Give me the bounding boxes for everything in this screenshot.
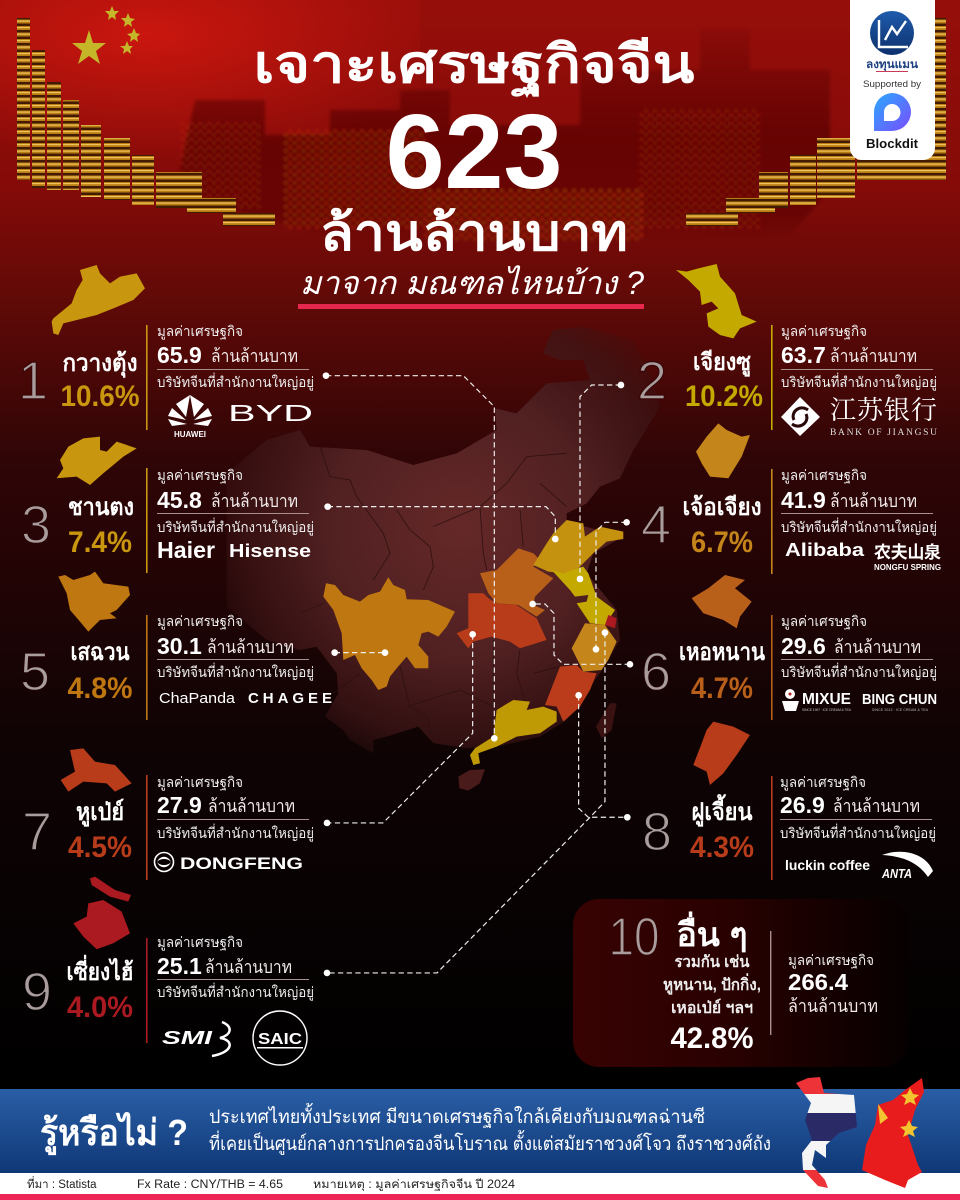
- panel: rank 3 shandong: ชานตง: [68, 494, 134, 521]
- logo: chapanda: ChaPanda: [159, 690, 236, 707]
- panel: rank 8 fujian: 26.9: [780, 792, 825, 818]
- panel: rank 9 shanghai: 25.1: [157, 953, 202, 979]
- logo: anta: [881, 852, 933, 881]
- panel: rank 5 sichuan: ล้านล้านบาท: [207, 637, 294, 657]
- panel: rank 3 shandong: [21, 437, 314, 573]
- callout: did you know: ที่เคยเป็นศูนย์กลางการปกครองจีนโบราณ ตั้งแต่สมัยราชวงศ์โจว ถึงราชวงศ์ถัง: [209, 1130, 771, 1155]
- icon: china flag stars: [72, 6, 140, 64]
- panel: rank 10 others: ล้านล้านบาท: [788, 996, 878, 1016]
- logo: bank of jiangsu: 江苏银行: [830, 390, 937, 427]
- icon: shaanxi china flag map: [862, 1078, 924, 1188]
- panel: rank 4 zhejiang: 41.9: [781, 487, 826, 513]
- panel: rank 8 fujian: ล้านล้านบาท: [833, 796, 920, 816]
- logo: huawei: HUAWEI: [174, 430, 206, 439]
- panel: rank 6 henan: ล้านล้านบาท: [834, 637, 921, 657]
- panel: rank 6 henan: เหอหนาน: [679, 639, 766, 666]
- panel: rank 6 henan: [641, 575, 937, 720]
- icon: henan: [692, 575, 752, 628]
- panel: rank 4 zhejiang: [641, 423, 941, 574]
- panel: rank 1 guangdong: มูลค่าเศรษฐกิจ: [157, 323, 243, 340]
- logo: nongfu spring: 农夫山泉: [874, 538, 941, 563]
- icon: blockdit: [874, 93, 911, 131]
- logo: saic: [253, 1011, 307, 1065]
- title: [254, 36, 695, 309]
- panel: rank 10 others: หูหนาน, ปักกิ่ง,: [663, 973, 761, 996]
- panel: rank 1 guangdong: 10.6%: [60, 380, 140, 413]
- logo: bank of jiangsu: [781, 390, 937, 438]
- panel: rank 2 jiangsu: 10.2%: [685, 380, 763, 413]
- icon: sichuan: [58, 572, 130, 632]
- panel: rank 6 henan: 4.7%: [691, 672, 753, 705]
- panel: rank 7 hubei: บริษัทจีนที่สำนักงานใหญ่อยู่: [157, 824, 314, 842]
- header photo: city and flag: [0, 0, 830, 245]
- logo: dongfeng: DONGFENG: [180, 854, 303, 873]
- panel: rank 5 sichuan: [20, 572, 332, 720]
- icon: shanghai: [73, 877, 131, 949]
- logo: smic: SMI: [162, 1028, 214, 1048]
- callout: did you know: [0, 1089, 960, 1173]
- footer sources: [0, 1173, 960, 1200]
- panel: rank 1 guangdong: บริษัทจีนที่สำนักงานใหญ่อยู่: [157, 373, 314, 391]
- connector dots: [323, 372, 633, 976]
- callout: did you know: ประเทศไทยทั้งประเทศ มีขนาดเศรษฐกิจใกล้เคียงกับมณฑลฉ่านซี: [209, 1103, 705, 1128]
- callout: did you know: รู้หรือไม่ ?: [40, 1111, 188, 1156]
- logo: mixue: SINCE 1997 · ICE CREAM & TEA: [802, 708, 852, 712]
- panel: rank 6 henan: มูลค่าเศรษฐกิจ: [781, 613, 867, 630]
- panel: rank 1 guangdong: 1: [18, 351, 48, 411]
- island: hainan: [458, 769, 485, 791]
- panel: rank 9 shanghai: มูลค่าเศรษฐกิจ: [157, 934, 243, 951]
- panel: rank 7 hubei: 27.9: [157, 792, 202, 818]
- logo: bing chun: BING CHUN: [862, 691, 937, 708]
- panel: rank 4 zhejiang: มูลค่าเศรษฐกิจ: [781, 467, 867, 484]
- panel: rank 4 zhejiang: 4: [641, 495, 671, 555]
- title: เจาะเศรษฐกิจจีน: [254, 36, 695, 98]
- logo: dongfeng: [154, 852, 303, 873]
- logo: luckin coffee: luckin coffee: [785, 857, 870, 873]
- panel: rank 8 fujian: ฝูเจี้ยน: [692, 793, 753, 827]
- icon: shandong: [57, 437, 137, 485]
- panel: rank 6 henan: 6: [641, 642, 671, 702]
- logo: hisense: Hisense: [229, 541, 311, 561]
- footer sources: Fx Rate : CNY/THB = 4.65: [137, 1179, 283, 1191]
- logo: alibaba: Alibaba: [785, 540, 865, 560]
- panel: rank 2 jiangsu: 63.7: [781, 342, 826, 368]
- panel: rank 6 henan: บริษัทจีนที่สำนักงานใหญ่อยู่: [781, 663, 937, 681]
- subtitle underline: [298, 304, 644, 309]
- coin stacks left: [17, 18, 275, 226]
- logo: haier: Haier: [157, 537, 215, 563]
- panel: rank 2 jiangsu: เจียงซู: [693, 349, 751, 377]
- province: sichuan: [323, 577, 455, 690]
- panel: rank 1 guangdong: 65.9: [157, 342, 202, 368]
- icon: logo circle: [870, 11, 914, 55]
- panel: rank 5 sichuan: มูลค่าเศรษฐกิจ: [157, 613, 243, 630]
- province: shandong: [533, 520, 623, 573]
- panel: rank 3 shandong: 7.4%: [68, 526, 132, 559]
- panel: rank 8 fujian: [642, 722, 936, 881]
- panel: rank 5 sichuan: 4.8%: [68, 672, 132, 705]
- panel: rank 9 shanghai: ล้านล้านบาท: [205, 957, 292, 977]
- footer sources: หมายเหตุ : มูลค่าเศรษฐกิจจีน ปี 2024: [313, 1178, 516, 1191]
- logo: bank of jiangsu: BANK OF JIANGSU: [830, 428, 937, 438]
- panel: rank 2 jiangsu: 2: [637, 351, 667, 411]
- logo: huawei: [168, 395, 212, 439]
- province: hubei: [457, 593, 547, 648]
- unit: ล้านล้านบาท: [320, 205, 628, 261]
- panel: rank 10 others: มูลค่าเศรษฐกิจ: [788, 952, 874, 969]
- panel: rank 2 jiangsu: บริษัทจีนที่สำนักงานใหญ่อยู่: [781, 373, 937, 391]
- panel: rank 2 jiangsu: [637, 264, 937, 438]
- panel: rank 10 others: 266.4: [788, 969, 848, 995]
- logo: mixue: [782, 689, 852, 712]
- panel: rank 4 zhejiang: ล้านล้านบาท: [830, 491, 917, 511]
- panel: rank 8 fujian: 8: [642, 802, 672, 862]
- logo: saic: SAIC: [258, 1031, 303, 1048]
- panel: rank 8 fujian: มูลค่าเศรษฐกิจ: [780, 774, 866, 791]
- province: guangdong: [470, 700, 557, 765]
- icon: jiangsu: [676, 264, 757, 338]
- province: fujian: [545, 665, 597, 722]
- big figure 623: 623: [386, 93, 562, 211]
- panel: rank 7 hubei: มูลค่าเศรษฐกิจ: [157, 774, 243, 791]
- province: jiangsu: [552, 567, 615, 625]
- logo: smic: [162, 1022, 230, 1056]
- panel: rank 9 shanghai: 9: [22, 962, 52, 1022]
- land silhouette: [227, 327, 660, 753]
- logo: nongfu spring: NONGFU SPRING: [874, 562, 941, 572]
- panel: rank 9 shanghai: [22, 877, 314, 1065]
- icon: guangdong: [52, 265, 145, 335]
- panel: rank 9 shanghai: บริษัทจีนที่สำนักงานใหญ่อยู่: [157, 983, 314, 1001]
- panel: rank 7 hubei: [22, 748, 314, 880]
- sponsor logo card: [850, 0, 935, 160]
- island: taiwan: [596, 703, 617, 738]
- sponsor logo card: Supported by: [863, 79, 921, 90]
- province: henan: [480, 548, 553, 617]
- panel: rank 4 zhejiang: บริษัทจีนที่สำนักงานใหญ่อยู่: [781, 518, 937, 536]
- panel: rank 10 others: [573, 899, 908, 1067]
- logo: mixue: MIXUE: [802, 691, 851, 708]
- panel: rank 7 hubei: 7: [22, 802, 52, 862]
- panel: rank 1 guangdong: [18, 265, 314, 439]
- panel: rank 10 others: เหอเป่ย์ ฯลฯ: [671, 998, 753, 1017]
- subtitle: มาจาก มณฑลไหนบ้าง ?: [300, 265, 644, 301]
- panel: rank 10 others: อื่น ๆ: [676, 911, 748, 953]
- panel: rank 4 zhejiang: เจ้อเจียง: [682, 494, 762, 521]
- china map: [227, 327, 660, 976]
- panel: rank 7 hubei: หูเป่ย์: [76, 798, 124, 827]
- panel: rank 7 hubei: ล้านล้านบาท: [208, 796, 295, 816]
- panel: rank 4 zhejiang: 6.7%: [691, 526, 753, 559]
- logo: anta: ANTA: [881, 866, 912, 881]
- panel: rank 7 hubei: 4.5%: [68, 831, 132, 864]
- connector lines: [326, 376, 630, 973]
- logo: chagee: CHAGEE: [248, 690, 332, 707]
- sponsor logo card: Blockdit: [866, 137, 919, 151]
- icon: hubei: [61, 748, 132, 792]
- panel: rank 5 sichuan: 5: [20, 642, 50, 702]
- panel: rank 6 henan: 29.6: [781, 633, 826, 659]
- panel: rank 2 jiangsu: มูลค่าเศรษฐกิจ: [781, 323, 867, 340]
- coin stacks right: [686, 18, 946, 226]
- panel: rank 8 fujian: บริษัทจีนที่สำนักงานใหญ่อยู่: [780, 824, 936, 842]
- panel: rank 5 sichuan: เสฉวน: [70, 639, 130, 666]
- logo: byd: BYD: [228, 400, 313, 426]
- icon: zhejiang: [696, 423, 750, 478]
- panel: rank 10 others: 10: [608, 907, 660, 967]
- footer sources: ที่มา : Statista: [27, 1176, 97, 1191]
- panel: rank 3 shandong: 3: [21, 495, 51, 555]
- panel: rank 10 others: 42.8%: [670, 1022, 754, 1055]
- province border lines: [300, 447, 567, 737]
- panel: rank 8 fujian: 4.3%: [690, 831, 754, 864]
- panel: rank 3 shandong: 45.8: [157, 487, 202, 513]
- panel: rank 9 shanghai: เซี่ยงไฮ้: [66, 954, 134, 986]
- panel: rank 3 shandong: ล้านล้านบาท: [211, 491, 298, 511]
- panel: rank 10 others: รวมกัน เช่น: [674, 953, 750, 971]
- panel: rank 1 guangdong: กวางตุ้ง: [62, 350, 138, 379]
- panel: rank 9 shanghai: 4.0%: [67, 991, 133, 1024]
- panel: rank 2 jiangsu: ล้านล้านบาท: [830, 346, 917, 366]
- panel: rank 5 sichuan: บริษัทจีนที่สำนักงานใหญ่อยู่: [157, 663, 314, 681]
- icon: fujian: [693, 722, 750, 785]
- panel: rank 3 shandong: บริษัทจีนที่สำนักงานใหญ่อยู่: [157, 518, 314, 536]
- province: shanghai: [605, 615, 617, 628]
- panel: rank 3 shandong: มูลค่าเศรษฐกิจ: [157, 467, 243, 484]
- province: zhejiang: [572, 623, 617, 672]
- panel: rank 1 guangdong: ล้านล้านบาท: [211, 346, 298, 366]
- logo: bing chun: SINCE 2013 · ICE CREAM & TEA: [872, 708, 929, 712]
- panel: rank 5 sichuan: 30.1: [157, 633, 202, 659]
- sponsor logo card: ลงทุนแมน: [866, 59, 919, 72]
- icon: thailand flag map: [796, 1077, 857, 1188]
